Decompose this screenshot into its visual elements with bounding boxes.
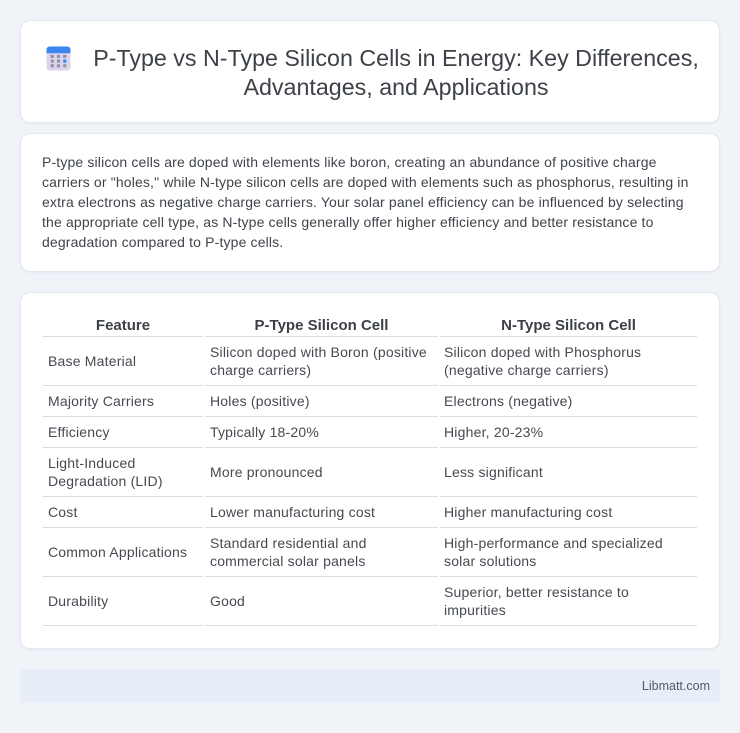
row: durability n-type: Superior, better resistance to (444, 584, 629, 600)
intro paragraph: P-type silicon cells are doped with elements like boron, creating an abundance of positive charge (42, 154, 657, 170)
row: light-induced degradation: Light-Induced (48, 455, 135, 471)
row: base material p-type: Silicon doped with Boron (positive (210, 344, 427, 360)
row: cost: Cost (48, 504, 78, 520)
row: cost p-type: Lower manufacturing cost (210, 504, 375, 520)
row: cost n-type: Higher manufacturing cost (444, 504, 612, 520)
title (93, 45, 699, 100)
footer credit: Libmatt.com (642, 679, 710, 693)
intro paragraph (42, 154, 689, 250)
row: efficiency: Efficiency (48, 424, 110, 440)
row: base material n-type: Silicon doped with Phosphorus (444, 344, 641, 360)
header card (20, 20, 720, 123)
intro paragraph: the appropriate cell type, as N-type cells generally offer higher efficiency and better resistance to (42, 214, 654, 230)
row: light-induced degradation (48, 455, 163, 489)
table header: p-type: P-Type Silicon Cell (255, 317, 388, 334)
row: applications n-type: High-performance and specialized (444, 535, 663, 551)
row: light-induced degradation: Degradation (LID) (48, 473, 163, 489)
row: efficiency n-type: Higher, 20-23% (444, 424, 543, 440)
comparison table panel (20, 292, 720, 649)
row: applications n-type: solar solutions (444, 553, 536, 569)
row: LID n-type: Less significant (444, 464, 543, 480)
row: applications p-type (210, 535, 367, 569)
row: durability n-type (444, 584, 629, 618)
row: base material p-type: charge carriers) (210, 362, 311, 378)
row: applications n-type (444, 535, 663, 569)
row: durability n-type: impurities (444, 602, 506, 618)
intro paragraph: degradation compared to P-type cells. (42, 234, 283, 250)
row: base material: Base Material (48, 353, 136, 369)
intro text panel (20, 133, 720, 272)
intro paragraph: carriers or "holes," while N-type silicon cells are doped with elements such as phosphorus, resulting in (42, 174, 689, 190)
row: durability p-type: Good (210, 593, 245, 609)
title: P-Type vs N-Type Silicon Cells in Energy: Key Differences, (93, 45, 699, 71)
table header: n-type: N-Type Silicon Cell (501, 317, 636, 334)
row: majority carriers: Majority Carriers (48, 393, 154, 409)
row: base material p-type (210, 344, 427, 378)
row: majority carriers p-type: Holes (positive) (210, 393, 310, 409)
title: Advantages, and Applications (243, 74, 549, 100)
intro paragraph: extra electrons as negative charge carriers. Your solar panel efficiency can be influenced by selecting (42, 194, 684, 210)
footer bar (20, 669, 720, 703)
row: efficiency p-type: Typically 18-20% (210, 424, 319, 440)
row: durability: Durability (48, 593, 108, 609)
icon: calendar grid (46, 46, 70, 70)
row: base material n-type (444, 344, 641, 378)
row: LID p-type: More pronounced (210, 464, 323, 480)
row: common applications: Common Applications (48, 544, 187, 560)
row: applications p-type: commercial solar panels (210, 553, 366, 569)
row: base material n-type: (negative charge carriers) (444, 362, 609, 378)
row: applications p-type: Standard residential and (210, 535, 367, 551)
row: majority carriers n-type: Electrons (negative) (444, 393, 573, 409)
table header: feature: Feature (96, 317, 150, 334)
